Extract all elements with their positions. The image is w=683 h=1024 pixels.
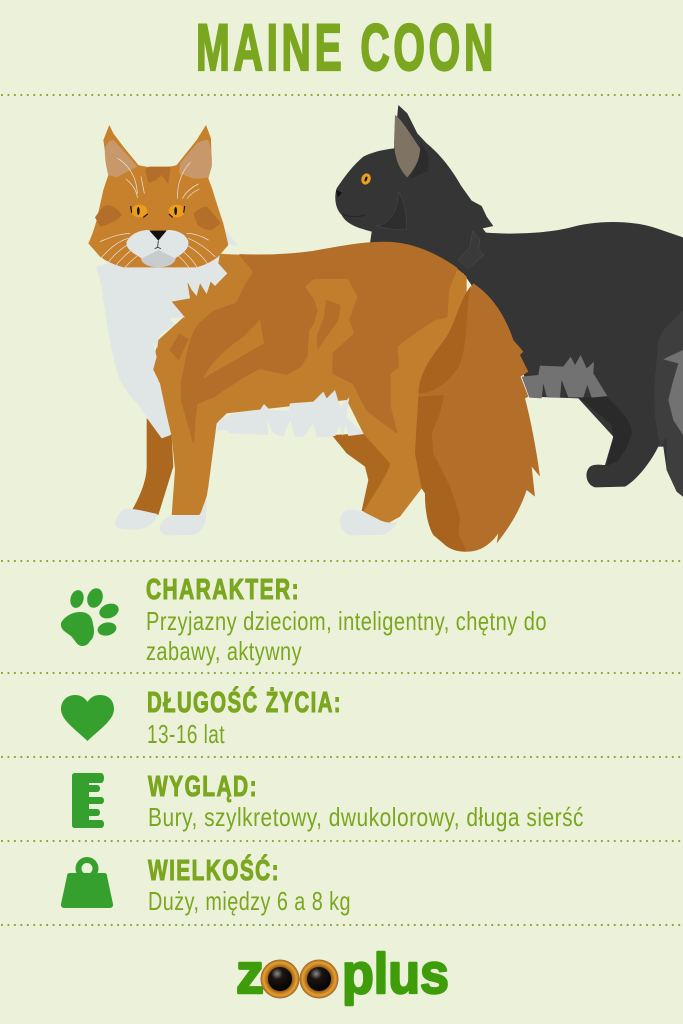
far front leg <box>132 418 173 515</box>
black cat body <box>335 105 683 497</box>
ear whiskers <box>118 158 199 198</box>
white chest <box>97 253 227 438</box>
character row <box>2 561 683 666</box>
torso and near legs <box>152 243 467 524</box>
orange cat head <box>88 125 238 273</box>
illustration: orange cat <box>97 243 540 552</box>
left inner ear <box>105 140 137 177</box>
size row <box>2 841 683 925</box>
title: MAINE COON <box>196 10 497 84</box>
chest fringe <box>458 231 484 268</box>
far front paw <box>115 509 157 530</box>
far hind leg shadow <box>579 397 632 466</box>
nose <box>149 231 167 241</box>
heading: charakter: CHARAKTER: <box>146 574 300 606</box>
text: charakter line 2: zabawy, aktywny <box>146 636 302 666</box>
head fur behind <box>218 223 238 253</box>
rear leg <box>654 310 683 497</box>
heading: lifespan: DŁUGOŚĆ ŻYCIA: <box>147 685 342 719</box>
nose and mouth <box>336 190 342 197</box>
tail base shadow <box>418 283 473 393</box>
light flank marking <box>203 320 264 378</box>
tail underside shadow <box>415 395 467 552</box>
heading: appearance: WYGLĄD: <box>148 771 258 803</box>
icon: heart <box>61 695 114 741</box>
cheek whiskers <box>100 233 215 273</box>
left eye <box>131 205 148 217</box>
eye <box>360 172 372 186</box>
logo: zooplus <box>236 942 449 1006</box>
text: appearance: Bury, szylkretowy, dwukolorowy, długa sierść <box>148 802 584 832</box>
tail <box>415 283 540 552</box>
muzzle <box>126 230 188 258</box>
shoulder marking <box>169 333 189 361</box>
near front paw <box>160 496 207 535</box>
dark loop marking <box>317 300 341 350</box>
neck shadow <box>376 192 407 230</box>
logo: zooplus: z <box>236 942 264 1006</box>
chin <box>141 249 176 267</box>
text: size: Duży, między 6 a 8 kg <box>148 886 351 916</box>
lifespan row <box>2 673 683 749</box>
inner ear <box>394 115 420 177</box>
heading: size: WIELKOŚĆ: <box>148 853 280 887</box>
icon: paw <box>61 586 121 646</box>
dark back patch <box>182 243 457 442</box>
white belly fur <box>217 390 364 437</box>
near hind paw <box>340 509 398 535</box>
mouth <box>155 241 161 249</box>
right inner ear <box>179 140 212 179</box>
right cheek marking <box>193 207 221 230</box>
icon: weight <box>61 857 113 908</box>
forehead stripes <box>145 167 171 184</box>
text: charakter line 1: Przyjazny dzieciom, inteligentny, chętny do <box>146 606 547 636</box>
far hind leg <box>332 433 391 513</box>
appearance row <box>2 757 683 832</box>
right eye <box>169 205 185 217</box>
icon: comb <box>72 773 104 828</box>
belly fur <box>522 355 607 398</box>
ear back <box>410 142 428 179</box>
left cheek marking <box>95 205 122 227</box>
rear leg grey fur <box>663 350 683 435</box>
logo: zooplus: plus <box>342 942 449 1006</box>
text: lifespan: 13-16 lat <box>147 719 225 749</box>
illustration: black cat <box>335 105 683 497</box>
head shape <box>88 125 228 267</box>
